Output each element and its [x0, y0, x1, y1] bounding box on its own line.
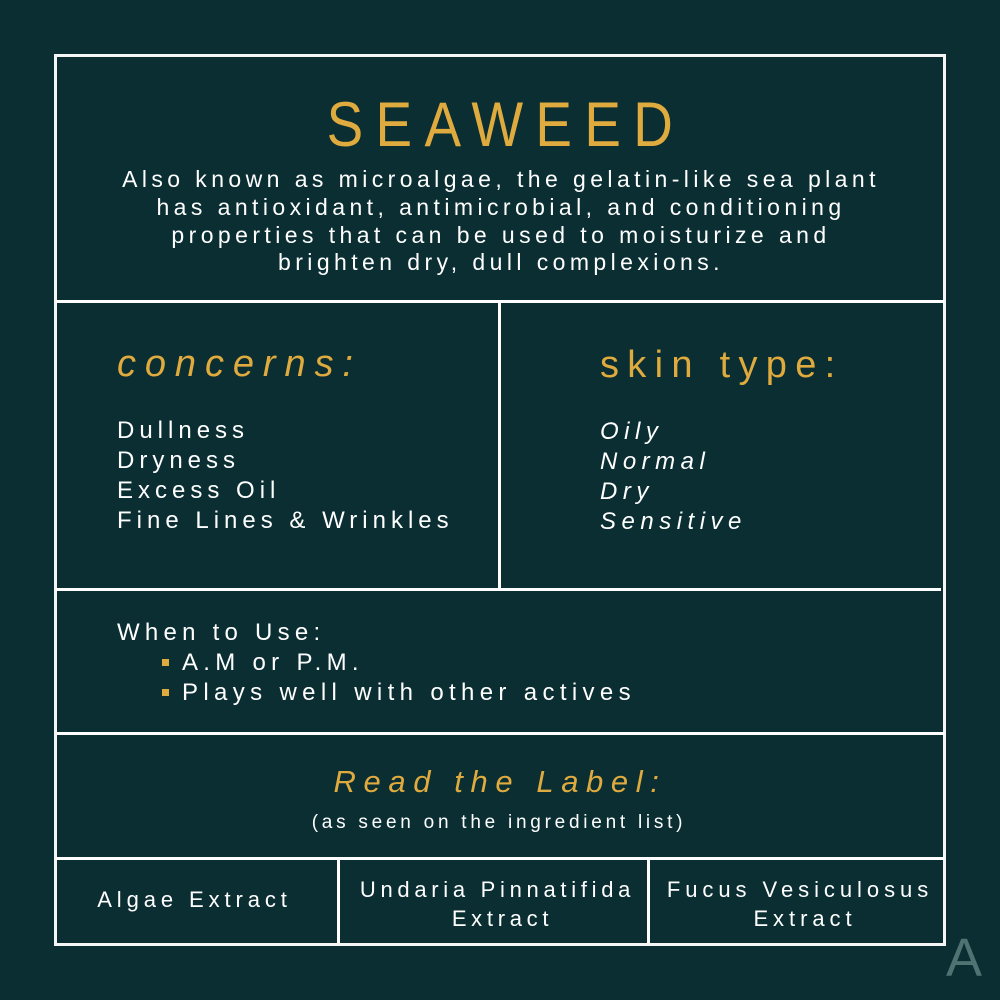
- concerns heading: concerns:: [117, 343, 362, 385]
- panel: skin type: [600, 344, 844, 535]
- ingredient: undaria: Undaria Pinnatifida: [360, 877, 635, 902]
- concerns list: Fine Lines & Wrinkles: [117, 507, 454, 534]
- skin type list: Oily: [600, 418, 663, 445]
- concerns list: Dryness: [117, 447, 240, 474]
- outer frame: [54, 54, 946, 946]
- ingredient: undaria: [360, 877, 635, 931]
- read the label heading: Read the Label:: [334, 764, 666, 799]
- skin type list: Dry: [600, 478, 654, 505]
- concerns list: Excess Oil: [117, 477, 280, 504]
- intro text: properties that can be used to moisturize and: [171, 222, 831, 248]
- skin type list: Sensitive: [600, 508, 747, 535]
- title: SEAWEED: [327, 90, 685, 160]
- ingredient: fucus: Fucus Vesiculosus: [667, 877, 933, 902]
- when to use heading: When to Use:: [117, 619, 325, 646]
- panel: when to use: [117, 619, 636, 706]
- bullet: actives: Plays well with other actives: [182, 679, 636, 706]
- ingredient: fucus: Extract: [753, 906, 857, 931]
- ingredient: fucus: [667, 877, 933, 931]
- concerns list: Dullness: [117, 417, 249, 444]
- skin type heading: skin type:: [600, 344, 844, 386]
- concerns list: [117, 417, 454, 534]
- intro text: has antioxidant, antimicrobial, and conditioning: [156, 194, 846, 220]
- panel: concerns: [117, 343, 454, 534]
- skin type list: [600, 418, 747, 535]
- ingredient: algae extract: Algae Extract: [97, 887, 292, 912]
- skin type list: Normal: [600, 448, 710, 475]
- bullet: morning or evening: A.M or P.M.: [182, 649, 364, 676]
- intro text: Also known as microalgae, the gelatin-like sea plant: [122, 166, 880, 192]
- ingredient: undaria: Extract: [452, 906, 553, 931]
- intro text: [122, 166, 880, 275]
- logo mark: A: [946, 928, 982, 988]
- read the label subtext: (as seen on the ingredient list): [312, 812, 686, 833]
- intro text: brighten dry, dull complexions.: [278, 249, 724, 275]
